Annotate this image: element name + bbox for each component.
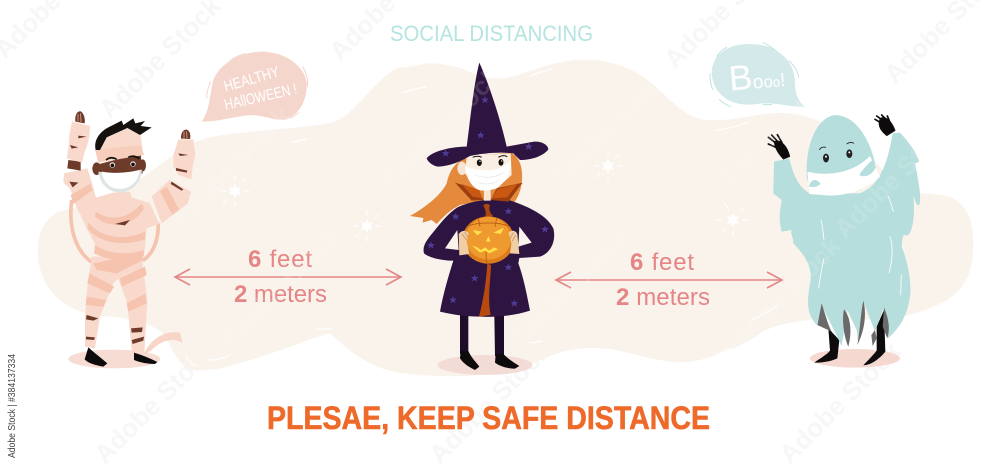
mummy legs [85, 253, 147, 353]
watermark pattern on artwork: Adobe Stock [163, 100, 297, 234]
mummy right arm [152, 130, 195, 223]
ghost legs [814, 310, 885, 365]
ghost hands [768, 115, 895, 159]
image id caption: Adobe Stock | #384137334 [6, 354, 18, 458]
distance label right: 6 feet [630, 249, 694, 276]
distance label left: 6 feet [248, 246, 312, 273]
mummy character [63, 111, 195, 368]
watermark pattern on artwork: Adobe Stock [213, 220, 347, 354]
ghost floor shadow [810, 349, 900, 368]
watermark pattern on artwork: Adobe Stock [713, 230, 847, 364]
watermark pattern on artwork: Adobe Stock [713, 60, 847, 194]
speech bubble: healthy halloween [202, 52, 308, 122]
ghost mask [807, 156, 880, 196]
witch neck and collar [455, 183, 523, 202]
speech bubble: healthy halloween: HAllOWEEN ! [223, 81, 299, 114]
sparkles [222, 151, 749, 241]
main message: PLESAE, KEEP SAFE DISTANCE [267, 400, 710, 436]
speech bubble: healthy halloween: HEALTHY [222, 64, 281, 96]
mummy loose bandages [71, 200, 158, 264]
speech bubble: booo: Booo! [727, 55, 786, 99]
witch face [457, 153, 512, 191]
arrow left [175, 269, 401, 285]
watermark pattern on artwork: Adobe Stock [503, 220, 637, 354]
ghost character [768, 115, 920, 368]
ghost highlights [819, 197, 901, 295]
witch character [410, 63, 554, 375]
witch stars [427, 96, 549, 307]
distance label left: 2 meters [234, 281, 327, 308]
watermark pattern on artwork: Adobe Stock [543, 60, 677, 194]
ghost shreds [817, 301, 889, 347]
watermark pattern on artwork: Adobe Stock [373, 60, 507, 194]
witch hair [410, 153, 522, 224]
mummy head [92, 118, 152, 193]
mummy shoes [85, 347, 157, 367]
mummy tail bandage [143, 332, 182, 355]
ghost head [807, 115, 875, 190]
witch pumpkin [462, 204, 514, 264]
background blob [38, 60, 973, 376]
speech bubble: booo [710, 43, 805, 107]
distance label left [234, 246, 327, 308]
witch legs [460, 315, 504, 356]
distance label right [616, 249, 710, 311]
witch robe [424, 199, 554, 317]
witch hands [459, 231, 519, 255]
witch shoes [460, 351, 519, 370]
mummy floor shadow [68, 350, 160, 368]
mummy torso [78, 192, 159, 260]
watermark pattern on white: Adobe Stock [88, 335, 222, 467]
arrow right [556, 272, 782, 288]
heading: social distancing: SOCIAL DISTANCING [390, 21, 593, 46]
ghost face [819, 142, 854, 162]
watermark pattern on artwork [163, 60, 1000, 364]
mummy left arm [63, 111, 98, 213]
ghost body [773, 133, 920, 346]
watermark pattern on white: Adobe Stock [423, 335, 557, 467]
watermark pattern on artwork: Adobe Stock [828, 110, 962, 244]
distance label right: 2 meters [616, 284, 710, 311]
witch floor shadow [438, 355, 532, 375]
watermark pattern on white: Adobe Stock [773, 335, 907, 467]
witch hat [427, 63, 548, 167]
